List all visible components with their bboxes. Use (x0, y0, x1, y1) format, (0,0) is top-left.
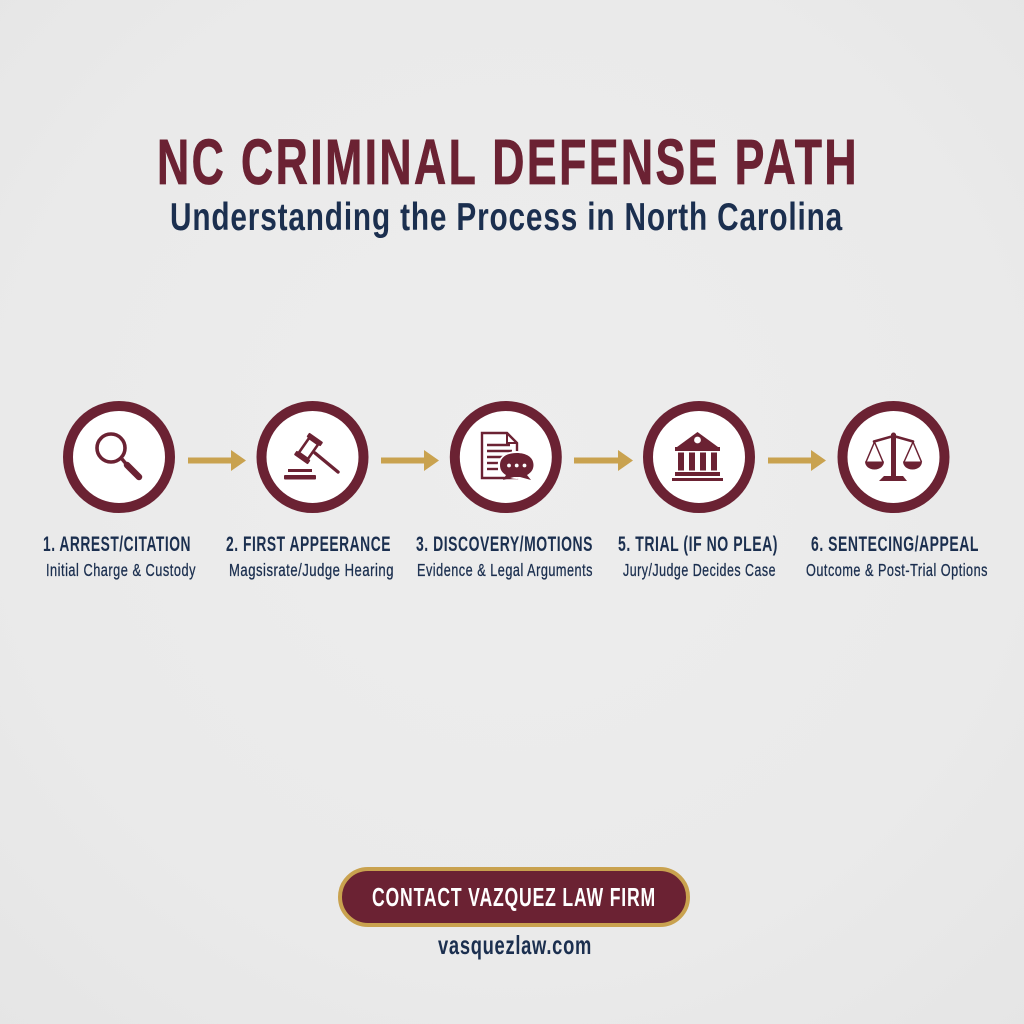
arrow 2 (381, 450, 439, 471)
step 2 description: Magsisrate/Judge Hearing (229, 560, 394, 580)
step 3: discovery/motions (416, 406, 593, 580)
step 2 heading: 2. FIRST APPEERANCE (226, 533, 391, 556)
icon: courthouse (648, 406, 750, 508)
step 5 heading: 5. TRIAL (IF NO PLEA) (618, 533, 778, 556)
website url: vasquezlaw.com (438, 930, 592, 960)
step 6: sentencing/appeal (806, 406, 988, 580)
icon: scales of justice (842, 406, 944, 508)
arrow 3 (574, 450, 633, 471)
icon: magnifying glass (68, 406, 170, 508)
arrow 4 (768, 450, 826, 471)
step 1: arrest/citation (43, 406, 196, 580)
icon: document with speech bubble (455, 406, 557, 508)
step 3 heading: 3. DISCOVERY/MOTIONS (416, 533, 593, 556)
step 5 description: Jury/Judge Decides Case (623, 560, 776, 580)
contact button (340, 869, 688, 925)
icon: gavel (262, 406, 364, 508)
step 1 description: Initial Charge & Custody (46, 560, 196, 580)
step 2: first appearance (226, 406, 394, 580)
step 1 heading: 1. ARREST/CITATION (43, 533, 191, 556)
step 5: trial (618, 406, 778, 580)
button label: CONTACT VAZQUEZ LAW FIRM (372, 882, 656, 912)
step 3 description: Evidence & Legal Arguments (417, 560, 593, 580)
arrow 1 (188, 450, 246, 471)
